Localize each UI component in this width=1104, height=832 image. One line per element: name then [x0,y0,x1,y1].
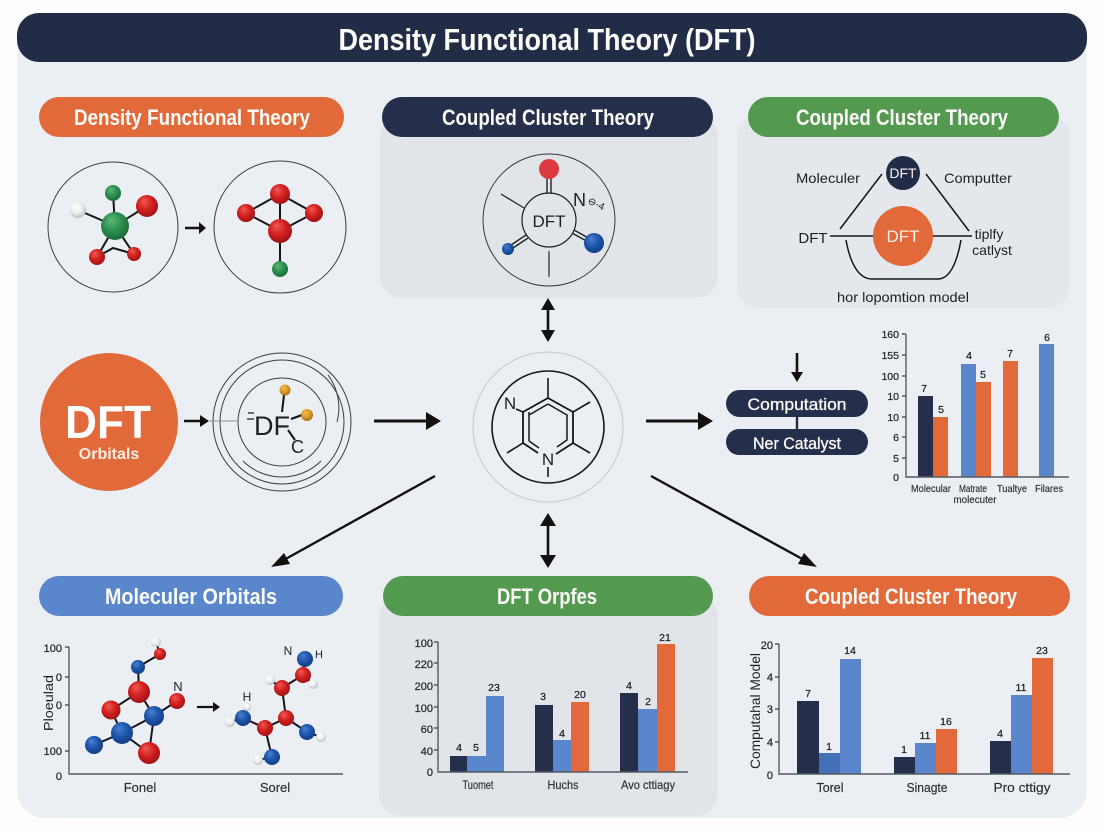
molecule: right ball and stick: H [315,649,323,661]
bar chart: upper right: 5 [893,453,899,465]
bar chart: upper right: 100 [881,371,899,383]
bar chart: DFT orpfes: 40 [421,746,433,758]
diagram: DFT triangle relationship: tiplfy [975,226,1003,242]
diagram: DFT circle with substituents: N [573,190,586,210]
molecule: red structure in circle [214,161,346,293]
chart axes and labels: Fonel [124,780,156,795]
molecule: right ball and stick: N [284,644,292,658]
bar chart: DFT orpfes: 23 [488,682,500,694]
bar chart: DFT orpfes: Tuomet [462,778,494,792]
bar chart: upper right: 7 [921,383,927,395]
diagram: DFT triangle relationship: DFT [798,230,828,247]
heading pill: density functional theory [39,97,344,137]
arrow: left to right molecule [197,702,220,712]
diagram: DFT circle with substituents: ⊖-4 [586,196,606,213]
heading pill: coupled cluster theory [382,97,713,137]
bar chart: upper right: 160 [881,329,899,341]
arrow: centre to coupled cluster lower [651,476,817,567]
arrow: badge to orbit diagram [184,415,209,427]
bar chart: computational model: 3 [767,704,773,716]
bar chart: computational model: 4 [997,728,1003,740]
bar chart: upper right: 6 [893,432,899,444]
bar chart: computational model: 11 [920,730,931,742]
bar chart: DFT orpfes: 100 [415,703,433,715]
bar chart: computational model: 1 [826,741,832,753]
bar chart: upper right: 0 [893,472,899,484]
arrow: down to computation [791,353,803,382]
pill: computation [726,390,868,417]
title banner: Density Functional Theory (DFT) [338,22,756,57]
heading pill: coupled cluster theory: Coupled Cluster Theory [805,584,1018,609]
pill: new catalyst [726,429,868,455]
arrow: orbitals to centre [374,412,441,430]
diagram: DFT triangle relationship: Computter [944,170,1012,186]
bar chart: computational model: Computahal Model [747,653,763,769]
bar chart: DFT orpfes: 60 [421,724,433,736]
diagram: concentric orbitals with DF label: C [291,437,304,457]
chart axes and labels: Sorel [260,780,290,795]
panel: coupled cluster theory lower [747,576,1070,795]
bar chart: DFT orpfes: Huchs [548,778,578,792]
bar chart: DFT orpfes: 2 [645,696,651,708]
bar chart: upper right: 155 [881,350,899,362]
diagram: concentric orbitals with DF label: DF [254,411,290,441]
bar chart: upper right: 10 [887,391,899,403]
bar chart: upper right: 7 [1007,348,1013,360]
bar chart: upper right: molecuter [954,494,997,506]
bar chart: computational model: 4 [767,737,773,749]
heading pill: molecular orbitals: Moleculer Orbitals [105,584,277,609]
bar chart: computational model [747,640,1070,795]
bar chart: upper right: 5 [980,369,986,381]
chart axes and labels: Ploeulad [41,675,56,731]
heading pill: coupled cluster theory [749,576,1070,616]
bar chart: DFT orpfes: 4 [456,742,462,754]
molecule: right ball and stick: H [243,690,251,704]
bar chart: DFT orpfes: 21 [659,632,671,644]
bar chart: computational model: 1 [901,744,907,756]
arrow: centre to molecular orbitals [271,476,435,567]
bar chart: upper right: 5 [938,404,944,416]
bar chart: DFT orpfes: 5 [473,742,479,754]
central molecule: pyridine ring: N [542,450,554,469]
pill: new catalyst: Ner Catalyst [753,434,841,453]
central molecule: pyridine ring [473,352,623,502]
bar chart: upper right: Filares [1035,483,1063,495]
diagram: DFT triangle relationship [796,156,1012,305]
heading pill: DFT orpfes [383,576,713,616]
bar chart: upper right: 10 [887,412,899,424]
bar chart: DFT orpfes: 4 [626,680,632,692]
central molecule: pyridine ring: N [504,394,516,413]
diagram: DFT triangle relationship: DFT [886,227,920,246]
heading pill: DFT orpfes: DFT Orpfes [497,584,597,609]
diagram: DFT triangle relationship: DFT [889,165,917,181]
heading pill: density functional theory: Density Functional Theory [74,105,311,130]
bar chart: computational model: 7 [805,688,811,700]
bar chart: DFT orpfes: 3 [540,691,546,703]
diagram: DFT circle with substituents: DFT [532,212,566,231]
chart axes and labels [41,643,343,795]
bar chart: computational model: 4 [767,672,773,684]
bar chart: DFT orpfes: 4 [559,728,565,740]
bar chart: computational model: 0 [767,770,773,782]
molecule: right ball and stick [225,644,326,765]
arrow: double vertical lower [540,513,556,568]
bar chart: DFT orpfes [415,632,688,792]
chart axes and labels: 0 [56,672,62,684]
pill: computation: Computation [748,395,846,414]
heading pill: coupled cluster theory: Coupled Cluster Theory [796,105,1009,130]
panel: coupled cluster theory green [737,97,1070,308]
heading pill: coupled cluster theory: Coupled Cluster Theory [442,105,655,130]
diagram: concentric orbitals with DF label [208,353,351,491]
panel: density functional theory [39,97,346,293]
chart axes and labels: 0 [56,700,62,712]
diagram: DFT circle with substituents [483,154,615,286]
bar chart: DFT orpfes: 20 [574,689,586,701]
chart axes and labels: 0 [56,771,62,783]
panel: molecular orbitals [39,576,343,795]
computation stack [726,390,868,455]
bar chart: computational model: 23 [1036,645,1048,657]
bar chart: DFT orpfes: 100 [415,638,433,650]
arrow: centre to computation [646,412,713,430]
bar chart: upper right [881,329,1069,506]
bar chart: upper right: 6 [1044,332,1050,344]
heading pill: coupled cluster theory [748,97,1059,137]
chart axes and labels: 100 [44,643,62,655]
bar chart: computational model: 11 [1016,682,1027,694]
bar chart: upper right: Tualtye [997,483,1027,495]
diagram: DFT triangle relationship: hor lopomtion model [837,289,969,305]
bar chart: upper right: Molecular [911,483,951,495]
molecule: left ball and stick: N [173,679,183,694]
bar chart: DFT orpfes: Avo cttiagy [621,778,675,792]
bar chart: computational model: Sinagte [906,780,948,795]
badge: DFT orbitals: DFT [65,396,151,448]
bar chart: computational model: Torel [816,780,844,795]
badge: DFT orbitals [40,353,178,491]
molecule: green centred structure in circle [48,162,178,292]
bar chart: upper right: Matrate [959,483,987,495]
bar chart: computational model: 16 [940,716,952,728]
bar chart: computational model: Pro cttigy [994,780,1051,795]
diagram: DFT triangle relationship: catlyst [972,242,1012,258]
bar chart: DFT orpfes: 200 [415,681,433,693]
title banner [17,13,1087,62]
molecule: left ball and stick [85,637,185,764]
arrow: double vertical upper [541,298,555,342]
bar chart: computational model: 14 [844,645,856,657]
bar chart: computational model: 20 [761,640,773,652]
bar chart: upper right: 4 [966,350,972,362]
bar chart: DFT orpfes: 220 [415,659,433,671]
arrow: first to second molecule [185,222,206,234]
diagram: DFT triangle relationship: Moleculer [796,170,860,186]
chart axes and labels: 100 [44,746,62,758]
badge: DFT orbitals: Orbitals [79,446,139,463]
heading pill: molecular orbitals [39,576,343,616]
bar chart: DFT orpfes: 0 [427,767,433,779]
panel: coupled cluster theory navy [380,97,718,298]
panel: DFT orpfes [379,576,718,816]
